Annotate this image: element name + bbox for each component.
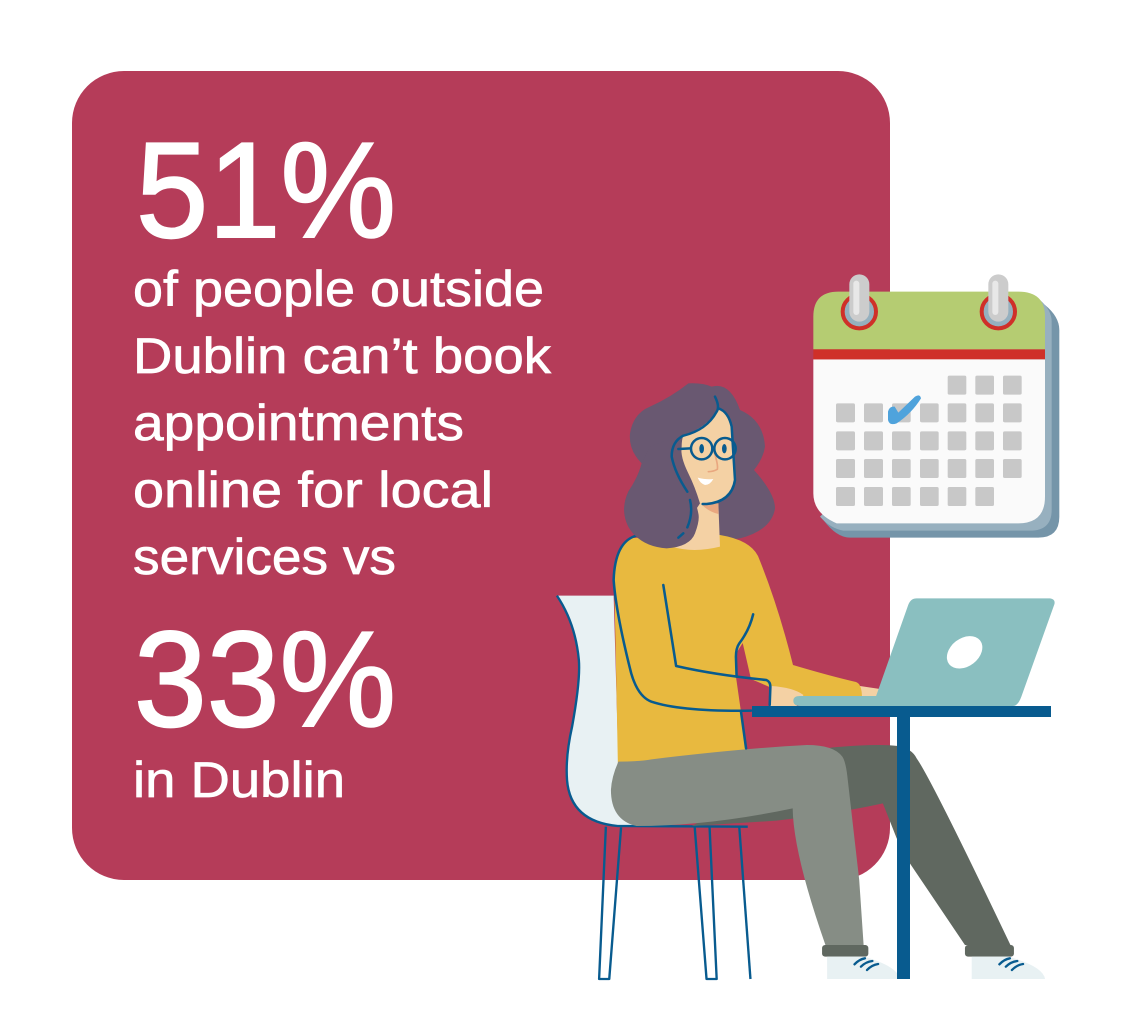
- illustration: table: [752, 706, 1051, 979]
- illustration: near hand: [770, 686, 803, 706]
- text: description: Dublin can’t book: [133, 328, 552, 384]
- illustration: far hand: [860, 686, 880, 697]
- text: description: [133, 261, 552, 585]
- icon: calendar: [813, 274, 1059, 538]
- text: description: of people outside: [133, 261, 544, 317]
- illustration: back leg: [692, 745, 1014, 957]
- illustration: shoes: [827, 957, 1045, 979]
- illustration: sweater: [614, 535, 862, 772]
- stat: 51%: 51%: [136, 114, 396, 266]
- panel: crimson background: [72, 71, 890, 880]
- illustration: chair: [557, 596, 750, 979]
- illustration: front leg: [611, 745, 868, 957]
- text: in Dublin: in Dublin: [133, 752, 345, 808]
- text: description: online for local: [133, 462, 493, 518]
- stat: 33%: 33%: [134, 603, 396, 755]
- text block: statistics: [133, 114, 552, 808]
- illustration: sweater outlines: [614, 536, 770, 748]
- text: description: appointments: [133, 395, 464, 451]
- illustration: laptop: [793, 598, 1055, 706]
- illustration: back hair: [624, 383, 775, 548]
- illustration: head: [624, 397, 736, 550]
- text: description: services vs: [133, 529, 396, 585]
